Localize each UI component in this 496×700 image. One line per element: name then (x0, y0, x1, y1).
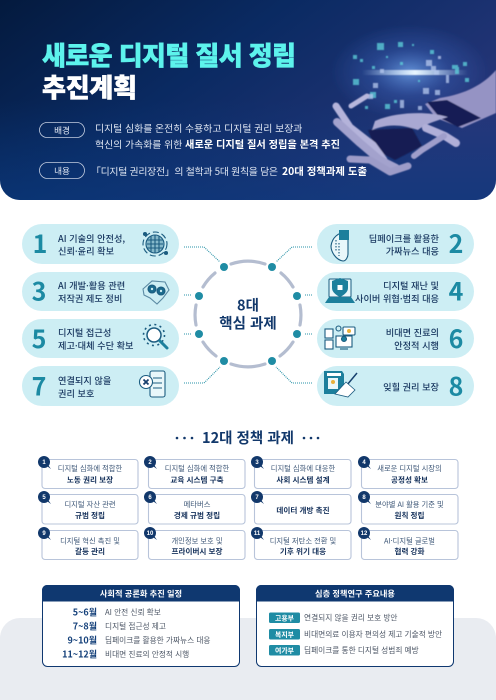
policy card 6: 6 (148, 495, 152, 501)
core task 3: AI 개발·활용 관련 (58, 278, 125, 292)
core task 6: 안정적 시행 (394, 338, 439, 352)
policy card 7: 데이터 개방 촉진 (276, 505, 330, 516)
core task 8: 잊힐 권리 보장 (383, 380, 440, 394)
policy card 2: 교육 시스템 구축 (170, 474, 224, 486)
policy card 1 (38, 456, 138, 488)
core task 5: 디지털 접근성 (58, 325, 111, 339)
core task 1: 신뢰·윤리 확보 (58, 244, 115, 258)
policy card 1: 노동 권리 보장 (67, 474, 113, 486)
policy card 1: 디지털 심화에 적합한 (58, 464, 123, 474)
icon: telemedicine (325, 326, 355, 349)
core task 7: 권리 보호 (58, 386, 95, 400)
policy card 3: 사회 시스템 설계 (276, 474, 330, 486)
core task 6: 비대면 진료의 (386, 325, 439, 339)
panel: public discussion schedule: 11~12월 (62, 648, 97, 660)
policy card 4 (358, 456, 458, 488)
core task 5 (22, 319, 179, 358)
panel: public discussion schedule: 비대면 진료의 안정적 시행 (105, 649, 189, 660)
policy card 12: 12 (361, 531, 368, 537)
policy card 5: 규범 정립 (75, 510, 105, 521)
policy card 7 (251, 491, 351, 524)
panel: public discussion schedule: 딥페이크를 활용한 가짜뉴스 대응 (105, 635, 210, 646)
policy card 3: 3 (255, 460, 259, 466)
policy card 4: 공정성 확보 (391, 474, 428, 486)
policy card 5: 5 (42, 495, 46, 501)
icon: deepfake face (331, 230, 349, 261)
policy card 11 (251, 527, 351, 560)
policy card 9: 9 (42, 531, 46, 537)
core task 4: 4 (449, 272, 464, 308)
policy card 12: AI·디지털 글로벌 (384, 536, 435, 546)
background row: 배경 (54, 124, 70, 136)
core task label (219, 294, 277, 334)
core task label: 핵심 과제 (219, 312, 277, 334)
core task ring (184, 247, 313, 383)
core task 1 (22, 224, 179, 264)
policy card 12: 협력 강화 (394, 546, 425, 557)
policy card 5: 디지털 자산 관련 (64, 500, 116, 510)
core task 6: 6 (449, 320, 463, 356)
policy card 8: 원칙 정립 (394, 510, 425, 521)
title: 추진계획 (42, 68, 137, 105)
core task 5: 제고·대체 수단 확보 (58, 338, 134, 352)
policy card 11: 11 (254, 531, 261, 537)
policy card 2: 디지털 심화에 적합한 (165, 464, 230, 474)
policy card 1: 1 (42, 460, 46, 466)
policy card 7: 7 (255, 495, 259, 501)
panel: policy research: 복지부 (275, 629, 295, 639)
policy card 2 (144, 456, 245, 488)
policy card 8: 8 (362, 495, 366, 501)
panel: policy research: 고용부 (275, 612, 295, 622)
core task 3: 3 (32, 272, 46, 308)
icon: AI brain (143, 232, 168, 256)
panel: policy research (256, 585, 454, 666)
content row: 내용 (54, 165, 70, 177)
panel: policy research: 연결되지 않을 권리 보호 방안 (304, 612, 397, 624)
core task 7: 7 (32, 368, 46, 404)
panel: policy research: 심층 정책연구 주요내용 (315, 588, 395, 600)
core task 4: 디지털 재난 및 (383, 278, 439, 292)
core task 3: 저작권 제도 정비 (58, 291, 122, 305)
panel: public discussion schedule: 9~10월 (67, 634, 97, 646)
icon: phone blocked (140, 371, 165, 397)
icon: magnifier (144, 324, 167, 348)
core task 4: 사이버 위협·범죄 대응 (355, 291, 439, 305)
panel: policy research: 비대면의료 이용자 편의성 제고 기술적 방안 (304, 629, 442, 640)
core task 2: 딥페이크를 활용한 (369, 231, 440, 245)
policy card 6: 경제 규범 정립 (174, 510, 220, 521)
panel: public discussion schedule: 5~6월 (73, 606, 97, 618)
header banner (0, 0, 496, 200)
background row: 혁신의 가속화를 위한 (95, 137, 182, 151)
core task 1: AI 기술의 안전성, (58, 231, 125, 245)
icon: folder and broom (324, 371, 357, 397)
core task 2: 가짜뉴스 대응 (386, 244, 439, 258)
core task 8: 8 (449, 368, 463, 404)
title (42, 36, 296, 105)
core task 7: 연결되지 않을 (58, 373, 111, 387)
content row: 20대 정책과제 도출 (282, 163, 367, 178)
policy card 10: 10 (147, 531, 154, 537)
policy card 6: 메타버스 (184, 500, 211, 510)
panel: public discussion schedule: AI 안전 신뢰 확보 (105, 607, 161, 618)
core task 2 (317, 224, 474, 264)
footer background (0, 618, 496, 700)
policy card 5 (38, 491, 138, 524)
policy card 6 (144, 491, 245, 524)
heading: 12 policy tasks: 12대 정책 과제 (202, 427, 294, 448)
forearm (425, 70, 496, 128)
panel: public discussion schedule: 디지털 접근성 제고 (105, 621, 166, 632)
panel: policy research: 여가부 (275, 645, 295, 655)
policy card 12 (358, 527, 458, 560)
panel: policy research: 딥페이크를 통한 디지털 성범죄 예방 (304, 645, 419, 656)
content row (40, 162, 367, 178)
panel: public discussion schedule (42, 585, 240, 666)
icon: laptop shield (325, 278, 355, 303)
panel: public discussion schedule: 7~8월 (73, 620, 97, 632)
background row (40, 121, 340, 151)
icon: brain with gears (143, 281, 169, 304)
core task 2: 2 (449, 225, 463, 261)
panel: public discussion schedule: 사회적 공론화 추진 일정 (100, 588, 182, 600)
title: 새로운 디지털 질서 정립 (42, 36, 296, 73)
core task 5: 5 (32, 320, 46, 356)
policy card 11: 기후 위기 대응 (280, 546, 326, 557)
content row: 「디지털 권리장전」의 철학과 5대 원칙을 담은 (91, 164, 278, 178)
core task 4 (317, 272, 474, 311)
policy card 8: 분야별 AI 활용 기준 및 (375, 500, 444, 510)
illustration: robot hand and data particles (330, 24, 496, 172)
policy card 9 (38, 527, 138, 560)
policy card 11: 디지털 저탄소 전환 및 (270, 536, 337, 546)
policy card 10 (144, 527, 245, 560)
core task 3 (22, 272, 179, 311)
core task 7 (22, 366, 179, 406)
background row: 새로운 디지털 질서 정립을 본격 추진 (185, 136, 340, 151)
policy card 10: 프라이버시 보장 (171, 546, 223, 557)
policy card 8 (358, 491, 458, 524)
background row: 디지털 심화를 온전히 수용하고 디지털 권리 보장과 (95, 121, 302, 135)
policy card 3 (251, 456, 351, 488)
policy card 2: 2 (148, 460, 152, 466)
core task 6 (317, 319, 474, 358)
fingers (336, 106, 384, 160)
thumb (426, 128, 456, 143)
policy card 3: 디지털 심화에 대응한 (271, 464, 336, 474)
palm (368, 128, 422, 160)
core task 1: 1 (33, 225, 47, 261)
policy card 4: 새로운 디지털 시장의 (377, 464, 442, 474)
policy card 9: 갈등 관리 (75, 546, 105, 557)
policy card 4: 4 (362, 460, 366, 466)
policy card 9: 디지털 혁신 촉진 및 (60, 536, 120, 546)
policy card 10: 개인정보 보호 및 (171, 536, 223, 546)
core task 8 (317, 366, 474, 406)
core task label: 8대 (237, 294, 259, 316)
